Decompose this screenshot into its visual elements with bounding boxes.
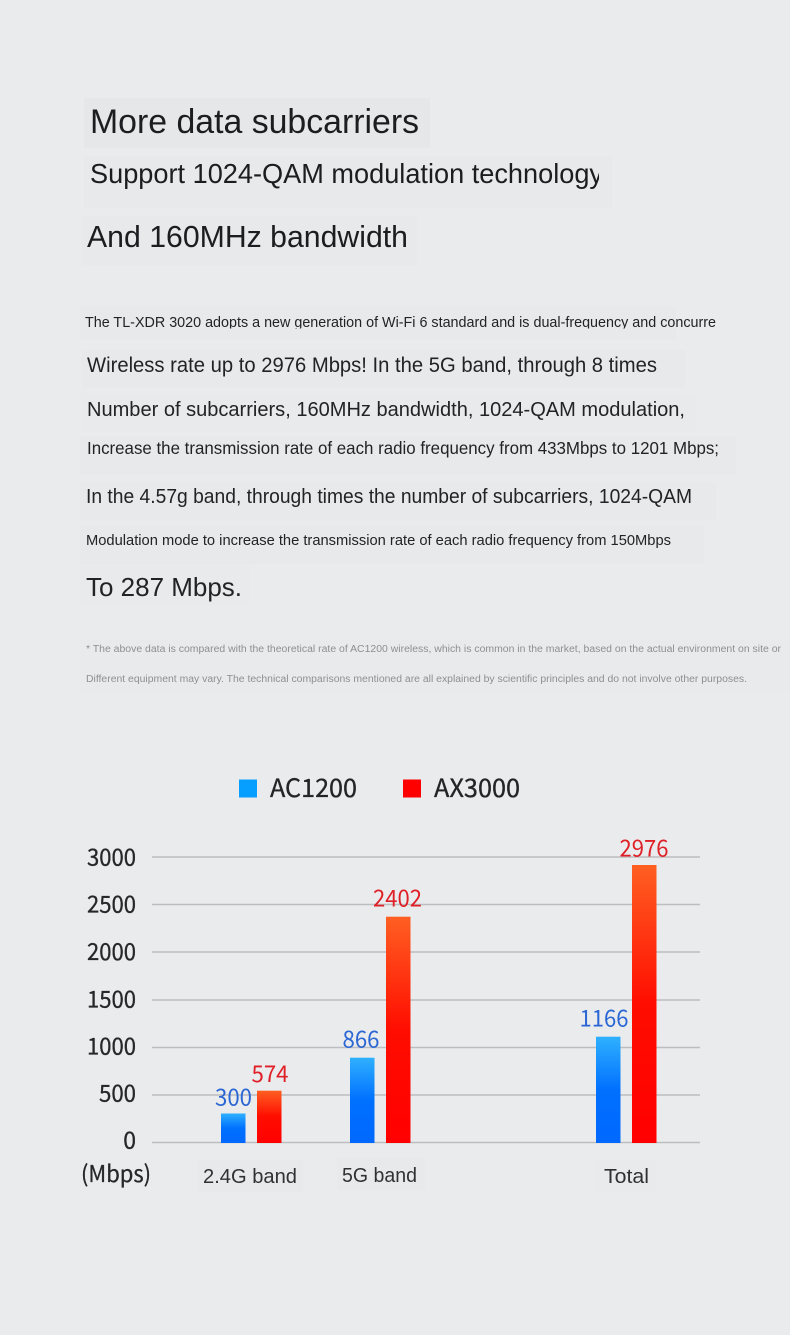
- body line 4: Increase the transmission rate of each radio frequency from 433Mbps to 1201 Mbps;: [87, 438, 719, 458]
- y axis unit: (Mbps): [81, 1155, 151, 1189]
- heading line 1: More data subcarriers: [90, 103, 419, 141]
- category labels: 5G band: [342, 1165, 417, 1187]
- bar chart: [81, 830, 700, 1192]
- group: 2.4G band: 574: [252, 1055, 289, 1089]
- group: 2.4G band: 300: [215, 1078, 252, 1112]
- y axis labels: 3000: [87, 839, 136, 873]
- heading line 2: Support 1024-QAM modulation technology: [90, 158, 603, 189]
- body line 5: In the 4.57g band, through times the number of subcarriers, 1024-QAM: [86, 486, 692, 508]
- y axis labels: 1500: [87, 980, 136, 1014]
- body text block: [80, 306, 736, 606]
- category labels: Total: [604, 1166, 649, 1188]
- category labels: [198, 1158, 656, 1192]
- y axis labels: 0: [123, 1122, 136, 1156]
- category labels: 2.4G band: [203, 1166, 297, 1188]
- chart legend: [239, 768, 520, 805]
- footnote: [80, 640, 790, 692]
- group: 5G band: [342, 879, 422, 1143]
- y axis labels: 500: [99, 1074, 136, 1108]
- body line 1: The TL-XDR 3020 adopts a new generation of Wi-Fi 6 standard and is dual-frequency and concurre: [85, 315, 716, 331]
- group: Total: [580, 830, 668, 1143]
- group: Total: 2976: [620, 830, 668, 864]
- heading block: [87, 108, 599, 248]
- legend: AC1200: AC1200: [270, 768, 357, 805]
- y axis labels: 1000: [87, 1028, 136, 1062]
- body line 2: Wireless rate up to 2976 Mbps! In the 5G band, through 8 times: [87, 354, 657, 377]
- footnote: Different equipment may vary. The technical comparisons mentioned are all explained by scientific principles and do not involve other purposes.: [86, 674, 747, 685]
- group: 5G band: 866: [342, 1020, 380, 1054]
- group: Total: 1166: [580, 1000, 628, 1034]
- y axis labels: [87, 839, 136, 1156]
- body line 3: Number of subcarriers, 160MHz bandwidth, 1024-QAM modulation,: [87, 399, 685, 421]
- body line 7: To 287 Mbps.: [86, 572, 242, 602]
- body line 6: Modulation mode to increase the transmission rate of each radio frequency from 150Mbps: [86, 532, 671, 549]
- grid lines: [152, 857, 700, 1142]
- group: 2.4G band: [215, 1055, 289, 1143]
- heading line 3: And 160MHz bandwidth: [87, 219, 408, 254]
- group: 5G band: 2402: [373, 879, 422, 913]
- y axis labels: 2500: [87, 886, 136, 920]
- footnote: * The above data is compared with the theoretical rate of AC1200 wireless, which is common in the market, based on the actual environment on site or: [86, 644, 782, 655]
- y axis labels: 2000: [87, 933, 136, 967]
- legend: AX3000: AX3000: [434, 768, 520, 805]
